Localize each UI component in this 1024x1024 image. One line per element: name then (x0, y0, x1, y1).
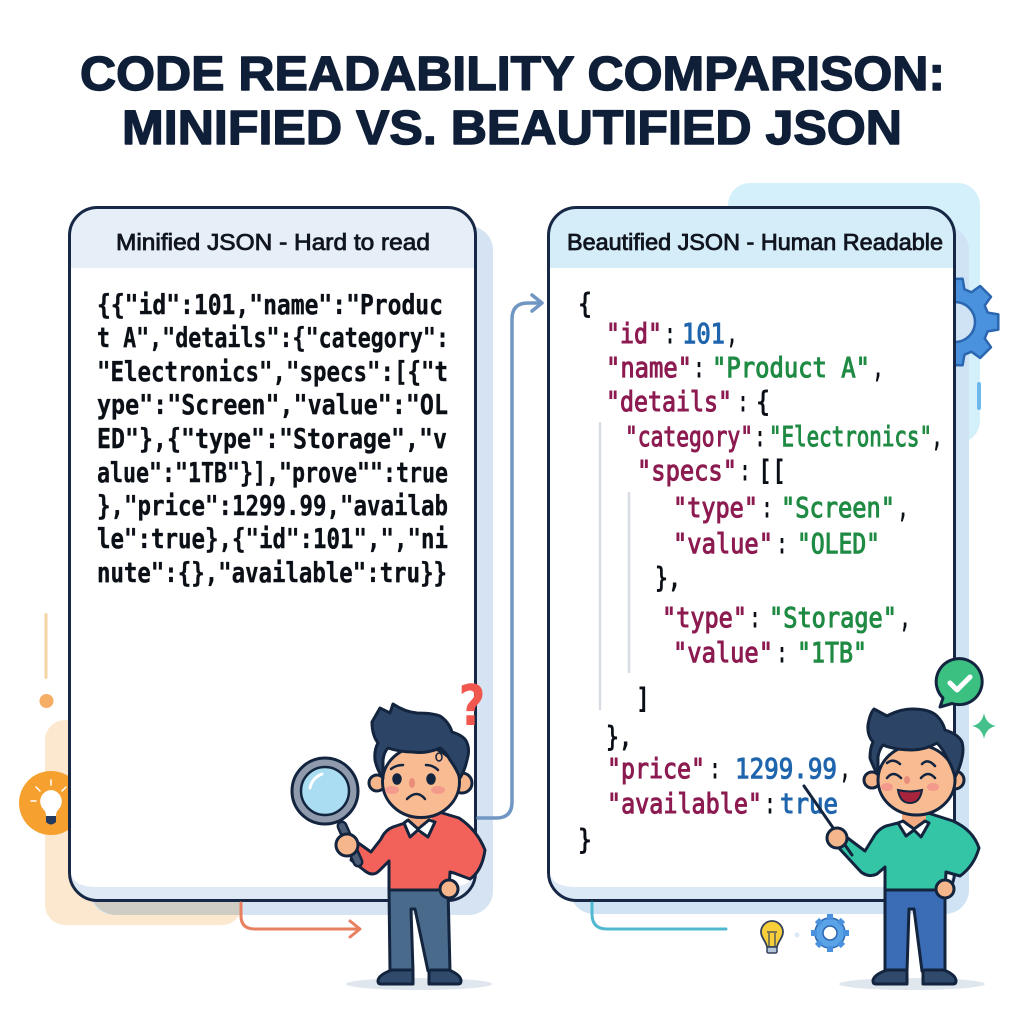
beautified code block: "Storage" (769, 602, 897, 634)
beautified code block: "type" (662, 602, 747, 634)
pointer stick (804, 786, 852, 855)
beautified code block: , (873, 352, 883, 384)
beautified code block: : (665, 318, 675, 350)
left panel bottom shade (70, 870, 475, 900)
shadow overlap (90, 895, 242, 915)
beautified code block: : (750, 602, 760, 634)
minified code block: ype":"Screen","value":"OL (97, 389, 448, 421)
panel: minified JSON (70, 208, 476, 900)
beautified code block: : (755, 421, 765, 453)
beautified code block: "available" (607, 788, 762, 820)
beautified code block: "value" (673, 637, 773, 669)
hair (868, 709, 963, 777)
beautified code block: , (900, 602, 910, 634)
beautified code block: "specs" (637, 455, 737, 487)
beautified code block: "OLED" (797, 528, 880, 560)
beautified code block: : (777, 528, 787, 560)
neck (408, 812, 432, 834)
beautified code block: , (932, 421, 942, 453)
beautified code block: }, (606, 721, 632, 753)
red sweater (351, 812, 485, 890)
arrow: minified to beautified (478, 295, 542, 818)
sweat drop (436, 753, 442, 761)
right panel shadow (570, 226, 969, 914)
beautified code block: 1299.99 (735, 753, 837, 785)
minified code block: {{"id":101,"name":"Produc (97, 289, 443, 321)
beautified code block: "price" (607, 753, 705, 785)
beautified code block: "type" (673, 492, 758, 524)
face (382, 746, 460, 818)
beautified code block: : (777, 637, 787, 669)
beautified code block: "details" (606, 386, 732, 418)
beautified code block: : (694, 352, 704, 384)
beautified code block: , (727, 318, 737, 350)
hand on hip (936, 880, 954, 898)
gripping hand (336, 834, 358, 856)
panel: beautified JSON (548, 208, 954, 900)
shoes (873, 970, 956, 984)
beautified code block: "1TB" (797, 637, 867, 669)
teal connector line (592, 903, 726, 929)
teal sweater (837, 813, 979, 890)
beautified code block: : (738, 386, 748, 418)
beautified code block (578, 288, 942, 856)
beautified code block: [[ (758, 455, 786, 487)
illustration: confused man with magnifier (292, 704, 492, 990)
collar (404, 820, 435, 837)
minified code block: le":true},{"id":101",","ni (97, 523, 448, 555)
title: MINIFIED VS. BEAUTIFIED JSON (122, 102, 902, 155)
beautified code block: "value" (673, 528, 773, 560)
left panel shadow (90, 226, 493, 915)
blue accent bar (977, 382, 981, 410)
right panel heading: Beautified JSON - Human Readable (567, 229, 943, 255)
right panel header background (549, 208, 954, 268)
beautified code block: : (710, 753, 720, 785)
icon: orange lightbulb badge (19, 771, 83, 835)
left panel header background (70, 208, 475, 268)
beautified code block: { (578, 288, 592, 320)
beautified code block: } (578, 824, 592, 856)
beautified code block: , (898, 492, 908, 524)
face (878, 745, 955, 815)
icon: small blue gear (811, 914, 849, 952)
left orange backing panel (45, 720, 242, 925)
beautified code block: "category" (625, 421, 753, 453)
icon: green sparkle (972, 713, 996, 739)
illustration: happy man with pointer (804, 709, 985, 990)
hair (372, 704, 468, 778)
cheeks and nose (385, 778, 445, 794)
beautified code block: "Product A" (712, 352, 870, 384)
hand on hip (440, 880, 458, 898)
minified code block (97, 289, 449, 589)
minified code block: },"price":1299.99,"availab (97, 490, 448, 522)
question mark: ? (458, 674, 486, 739)
minified code block: ED"},{"type":"Storage","v (97, 423, 447, 455)
icon: green check speech bubble (936, 659, 982, 707)
ears (369, 773, 472, 793)
beautified code block: : (762, 492, 772, 524)
beautified code block: "Electronics" (769, 421, 932, 453)
arrow: orange connector (241, 903, 360, 937)
title (80, 48, 945, 155)
minified code block: t A","details":{"category": (97, 322, 449, 354)
title: CODE READABILITY COMPARISON: (80, 48, 945, 101)
beautified code block: , (840, 753, 850, 785)
left decoration: line and dot (40, 613, 54, 708)
icon: small yellow bulb (761, 921, 783, 953)
minified code block: "Electronics","specs":[{"t (97, 356, 448, 388)
pants (885, 890, 945, 971)
left panel heading: Minified JSON - Hard to read (116, 229, 430, 255)
beautified code block: "id" (606, 318, 662, 350)
shoes (378, 970, 461, 984)
minified code block: nute":{},"available":tru}} (97, 557, 447, 589)
beautified code block: "name" (606, 352, 692, 384)
right light-blue backing panel (728, 183, 980, 443)
beautified code block: : (765, 788, 775, 820)
indent guides (600, 422, 629, 710)
eyes and smile (887, 761, 935, 778)
neck (902, 812, 926, 832)
beautified code block: ] (636, 683, 650, 715)
beautified code block: true (780, 788, 838, 820)
beautified code block: : (740, 455, 750, 487)
ears (864, 771, 964, 789)
ground shadow (839, 978, 985, 990)
icon: large gear behind right panel (935, 279, 998, 365)
brows, eyes, mouth (391, 765, 438, 799)
ground shadow (346, 978, 492, 990)
pointing hand (827, 828, 847, 848)
magnifying glass (292, 758, 358, 862)
collar (898, 821, 929, 837)
right panel bottom shade (549, 870, 954, 900)
minified code block: alue":"1TB"}],"prove"":true (97, 457, 448, 489)
beautified code block: 101 (682, 318, 725, 350)
cheeks and nose (881, 776, 939, 791)
beautified code block: { (756, 386, 770, 418)
pants (389, 890, 450, 971)
beautified code block: }, (655, 562, 681, 594)
small dot (794, 932, 800, 938)
beautified code block: "Screen" (781, 492, 895, 524)
